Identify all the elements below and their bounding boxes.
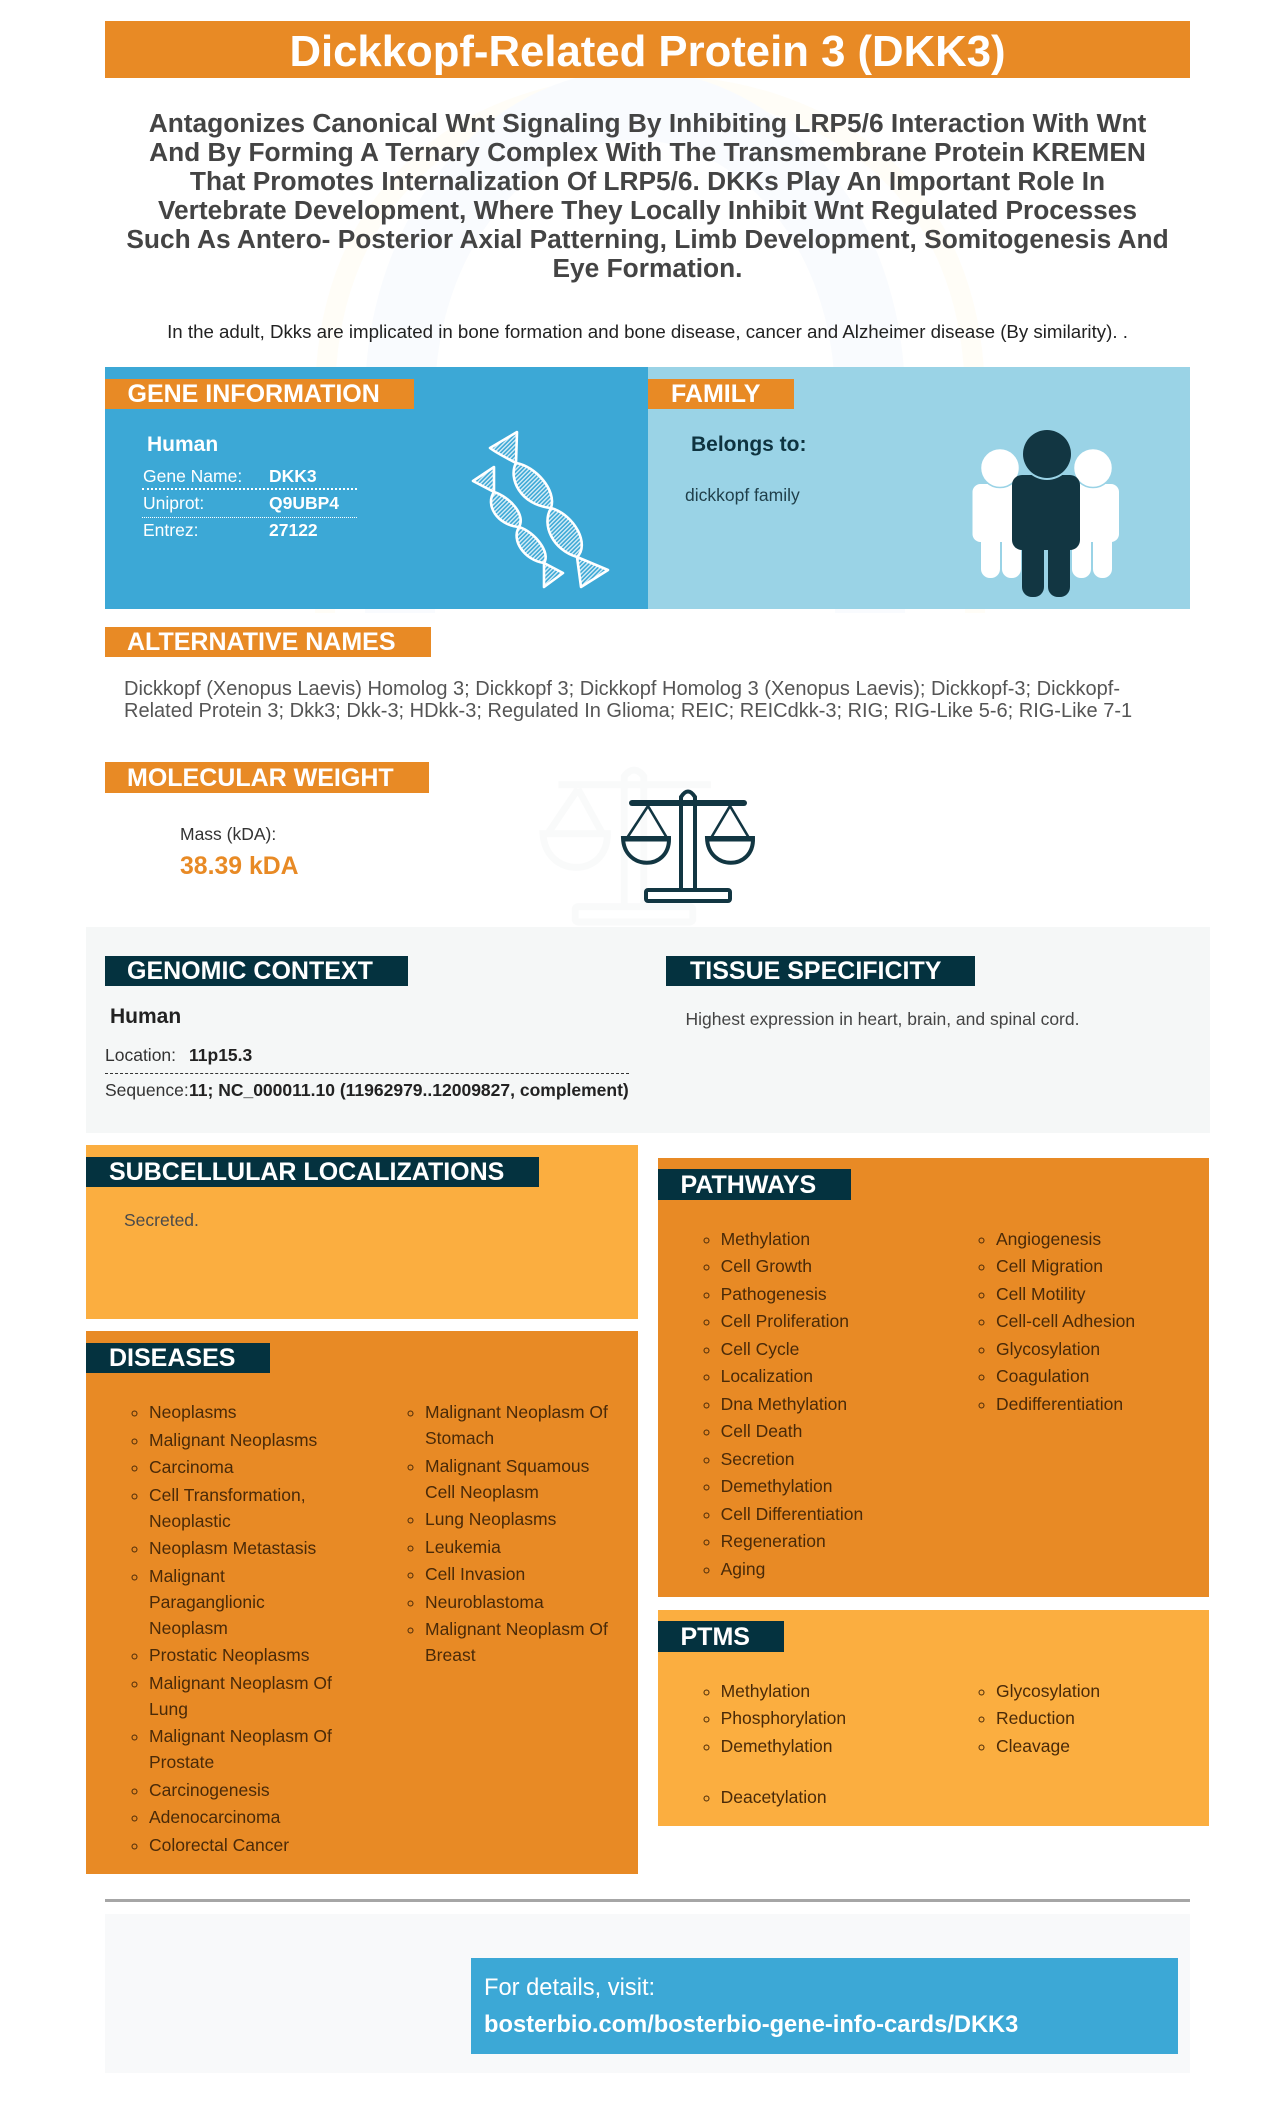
list: pathways column 1 (704, 1229, 863, 1579)
list: pathways column 1: Localization (721, 1366, 813, 1386)
list: diseases column 2: Cell Invasion (425, 1564, 525, 1584)
alternative names text: Related Protein 3; Dkk3; Dkk-3; HDkk-3; Regulated In Glioma; REIC; REICdkk-3; RIG; RIG-Like 5-6; RIG-Like 7-1 (124, 700, 1132, 722)
heading: genomic context: GENOMIC CONTEXT (127, 957, 373, 985)
list: pathways column 1: Regeneration (721, 1531, 826, 1551)
heading: family (648, 379, 794, 409)
summary text: And By Forming A Ternary Complex With The Transmembrane Protein KREMEN (149, 137, 1146, 167)
alternative names text (124, 678, 1132, 722)
list: diseases column 1: Cell Transformation, (149, 1484, 306, 1504)
uniprot value: Q9UBP4 (269, 493, 339, 513)
list: ptms column 2 (978, 1681, 1100, 1756)
list: diseases column 2: Lung Neoplasms (425, 1509, 556, 1529)
list: diseases column 1: Malignant Neoplasms (149, 1430, 317, 1450)
list: pathways column 2: Coagulation (996, 1366, 1089, 1386)
list: ptms column 2: Glycosylation (996, 1681, 1100, 1701)
list: diseases column 1: Carcinoma (149, 1457, 234, 1477)
sequence row: 11; NC_000011.10 (11962979..12009827, complement) (189, 1080, 629, 1100)
list: diseases column 2: Malignant Neoplasm Of (425, 1619, 608, 1639)
list: pathways column 2: Cell-cell Adhesion (996, 1311, 1135, 1331)
callout: details link (471, 1958, 1178, 2054)
list: diseases column 1: Prostate (149, 1752, 214, 1772)
heading: subcellular localizations: SUBCELLULAR LOCALIZATIONS (109, 1158, 504, 1186)
heading: pathways (658, 1169, 851, 1200)
gene name label: Gene Name: (143, 466, 242, 486)
list: diseases column 1: Neoplasm Metastasis (149, 1538, 316, 1558)
species label: Human (110, 1005, 181, 1028)
species label: Human (147, 433, 218, 456)
list: diseases column 1: Lung (149, 1698, 188, 1718)
list: pathways column 1: Cell Cycle (721, 1339, 799, 1359)
list: diseases column 1: Neoplasm (149, 1618, 228, 1638)
heading: molecular weight: MOLECULAR WEIGHT (127, 764, 394, 792)
list: diseases column 2: Breast (425, 1645, 476, 1665)
heading: alternative names: ALTERNATIVE NAMES (127, 628, 396, 656)
summary text: Antagonizes Canonical Wnt Signaling By Inhibiting LRP5/6 Interaction With Wnt (149, 108, 1146, 138)
list: pathways column 1: Dna Methylation (721, 1394, 847, 1414)
list: diseases column 1: Malignant Neoplasm Of (149, 1726, 332, 1746)
gene name value: DKK3 (269, 466, 317, 486)
list: diseases column 1 (132, 1402, 332, 1854)
title: Dickkopf-Related Protein 3 (DKK3) (289, 27, 1006, 76)
callout url: bosterbio.com/bosterbio-gene-info-cards/DKK3 (484, 2012, 1018, 2038)
list: diseases column 1: Carcinogenesis (149, 1780, 270, 1800)
list: ptms column 1 (704, 1681, 846, 1807)
family name: dickkopf family (685, 485, 800, 505)
panel: ptms (658, 1610, 1209, 1826)
list: pathways column 2: Angiogenesis (996, 1229, 1101, 1249)
list: diseases column 2: Malignant Neoplasm Of (425, 1402, 608, 1422)
list: pathways column 1: Secretion (721, 1449, 795, 1469)
adult role text: In the adult, Dkks are implicated in bone formation and bone disease, cancer and Alzheimer disease (By similarity). . (167, 321, 1128, 342)
list: pathways column 2: Dedifferentiation (996, 1394, 1123, 1414)
list: pathways column 1: Demethylation (721, 1476, 832, 1496)
icon: balance scale (620, 790, 755, 903)
summary text: That Promotes Internalization Of LRP5/6. DKKs Play An Important Role In (190, 166, 1105, 196)
list: ptms column 2: Cleavage (996, 1736, 1070, 1756)
list: ptms column 1: Deacetylation (721, 1787, 827, 1807)
list: diseases column 2 (408, 1402, 608, 1665)
list: ptms column 1: Methylation (721, 1681, 810, 1701)
list: pathways column 2: Cell Motility (996, 1284, 1085, 1304)
panel: diseases (86, 1331, 638, 1874)
list: pathways column 2 (978, 1229, 1135, 1414)
list: ptms column 1: Phosphorylation (721, 1708, 846, 1728)
heading: family: FAMILY (671, 380, 760, 408)
localization text: Secreted. (124, 1210, 199, 1230)
list: pathways column 1: Aging (721, 1559, 765, 1579)
panel: genomic context and tissue specificity (86, 927, 1210, 1133)
heading: tissue specificity: TISSUE SPECIFICITY (690, 957, 941, 985)
title (105, 21, 1190, 78)
list: diseases column 1: Neoplastic (149, 1510, 231, 1530)
mass label: Mass (kDA): (180, 824, 276, 844)
icon: people group (972, 430, 1119, 597)
heading: pathways: PATHWAYS (680, 1171, 816, 1199)
background watermark (300, 78, 1000, 613)
summary text: Vertebrate Development, Where They Locally Inhibit Wnt Regulated Processes (158, 195, 1137, 225)
list: diseases column 2: Stomach (425, 1428, 494, 1448)
sequence row: Sequence: (105, 1080, 189, 1100)
location row (105, 1045, 252, 1065)
list: diseases column 1: Adenocarcinoma (149, 1807, 280, 1827)
callout intro text: For details, visit: (484, 1975, 655, 2001)
heading: diseases (86, 1343, 270, 1373)
list: diseases column 1: Malignant Neoplasm Of (149, 1672, 332, 1692)
entrez label: Entrez: (143, 520, 198, 540)
list: pathways column 1: Cell Death (721, 1421, 802, 1441)
alternative names text: Dickkopf (Xenopus Laevis) Homolog 3; Dickkopf 3; Dickkopf Homolog 3 (Xenopus Laevis); Dickkopf-3; Dickkopf- (124, 678, 1120, 700)
heading: ptms: PTMS (680, 1623, 750, 1651)
belongs to label: Belongs to: (691, 433, 806, 456)
panel: family (648, 367, 1190, 609)
summary text: Eye Formation. (553, 253, 742, 283)
panel: gene information (105, 367, 648, 609)
list: pathways column 1: Pathogenesis (721, 1284, 827, 1304)
panel: footer (105, 1914, 1190, 2073)
heading: ptms (658, 1621, 784, 1652)
list: pathways column 1: Methylation (721, 1229, 810, 1249)
mass value: 38.39 kDA (180, 853, 299, 880)
summary text (126, 108, 1169, 283)
list: pathways column 2: Glycosylation (996, 1339, 1100, 1359)
list: ptms column 1: Demethylation (721, 1736, 832, 1756)
tissue specificity text: Highest expression in heart, brain, and spinal cord. (686, 1009, 1079, 1029)
list: pathways column 1: Cell Proliferation (721, 1311, 849, 1331)
list: pathways column 1: Cell Growth (721, 1256, 812, 1276)
icon: dna helices (472, 430, 610, 588)
list: diseases column 2: Malignant Squamous (425, 1456, 589, 1476)
list: diseases column 2: Cell Neoplasm (425, 1482, 539, 1502)
panel: pathways (658, 1158, 1209, 1597)
list: pathways column 1: Cell Differentiation (721, 1504, 863, 1524)
location row: Location: (105, 1045, 176, 1065)
summary text: Such As Antero- Posterior Axial Patterning, Limb Development, Somitogenesis And (126, 224, 1169, 254)
panel: subcellular localizations (86, 1145, 638, 1319)
heading: diseases: DISEASES (109, 1344, 235, 1372)
list: pathways column 2: Cell Migration (996, 1256, 1103, 1276)
list: diseases column 2: Leukemia (425, 1536, 501, 1556)
list: diseases column 1: Neoplasms (149, 1402, 237, 1422)
uniprot label: Uniprot: (143, 493, 204, 513)
list: diseases column 1: Prostatic Neoplasms (149, 1645, 309, 1665)
list: diseases column 2: Neuroblastoma (425, 1592, 544, 1612)
entrez value: 27122 (269, 520, 318, 540)
list: diseases column 1: Paraganglionic (149, 1592, 265, 1612)
list: diseases column 1: Colorectal Cancer (149, 1834, 289, 1854)
list: diseases column 1: Malignant (149, 1566, 225, 1586)
location row: 11p15.3 (189, 1045, 252, 1065)
list: ptms column 2: Reduction (996, 1708, 1075, 1728)
heading: gene information: GENE INFORMATION (128, 380, 380, 408)
